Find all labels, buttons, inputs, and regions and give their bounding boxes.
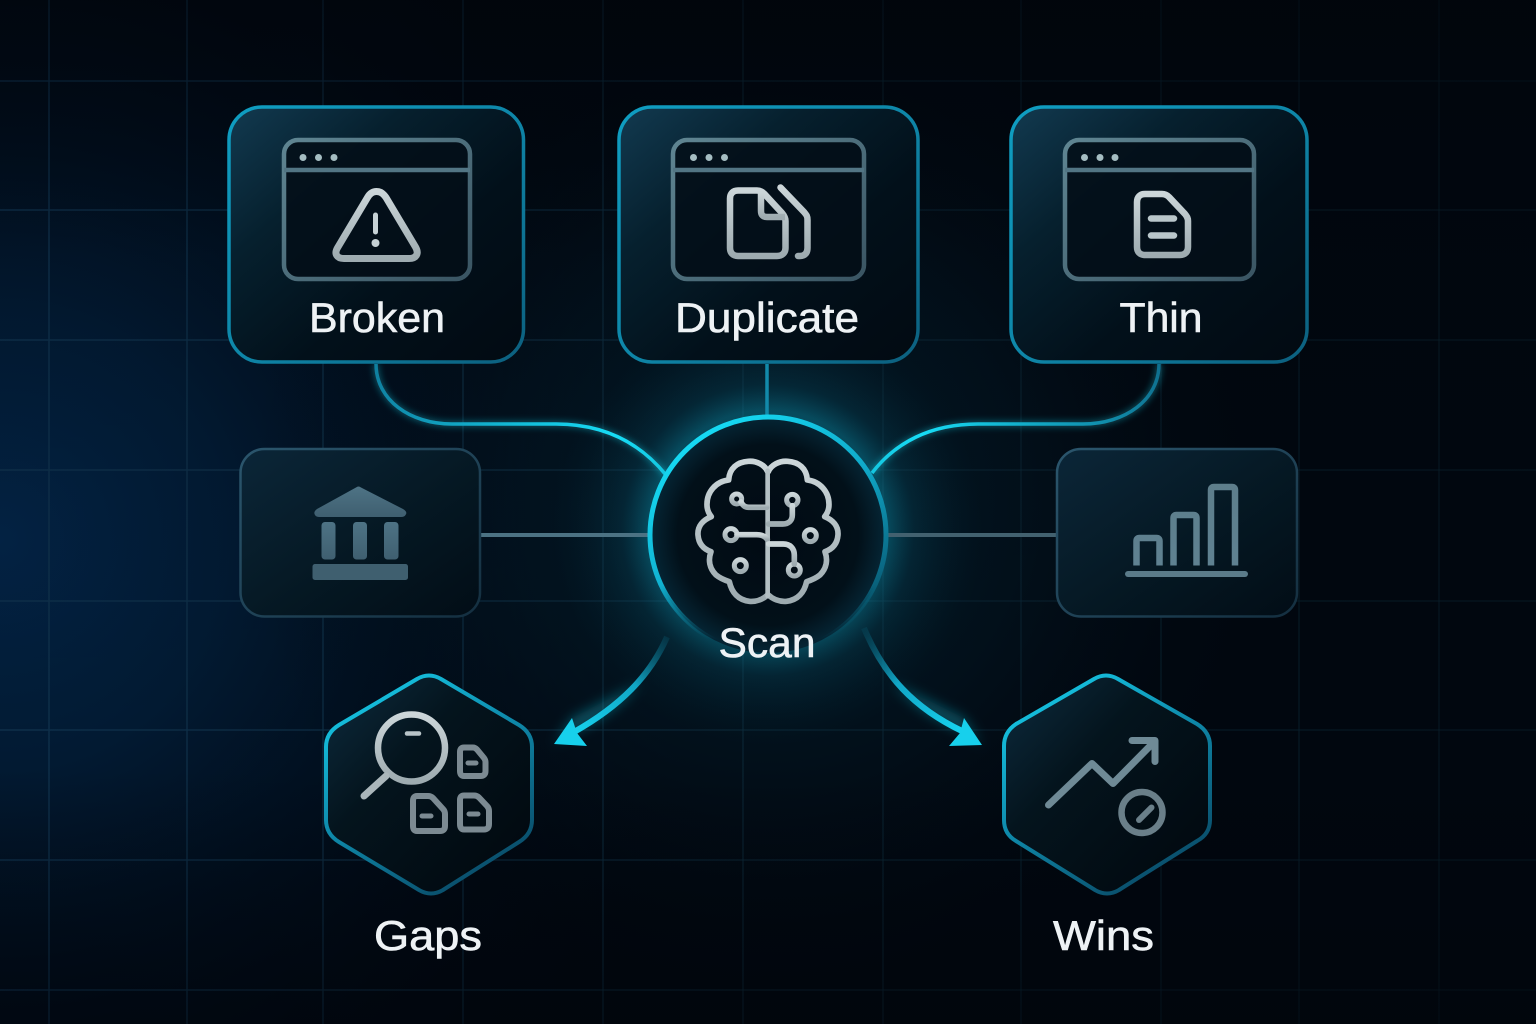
central Scan node: [650, 417, 886, 653]
icon: circular badge: [1122, 792, 1162, 833]
panel: Broken: [229, 107, 524, 362]
label: Wins: Wins: [1053, 912, 1154, 959]
panel: bank: [240, 449, 480, 616]
connector: chart panel to Scan: [888, 533, 1057, 537]
label: Broken: Broken: [309, 294, 445, 341]
icon: bar chart: [1128, 487, 1245, 574]
icon: document cluster: [413, 748, 489, 831]
icon: circuit brain: [698, 461, 838, 601]
panel: Thin: [1011, 107, 1307, 362]
label: Duplicate: Duplicate: [675, 294, 859, 341]
icon: rising trend arrow: [1048, 740, 1155, 805]
hexagon: Gaps: [326, 676, 532, 894]
panel: Duplicate: [619, 107, 918, 362]
arrow: Scan to Wins: [864, 628, 982, 746]
panel: bar chart: [1057, 449, 1297, 616]
panel: Wins: [1004, 676, 1210, 894]
arrow: Scan to Gaps: [554, 637, 667, 746]
icon: browser window with warning: [284, 140, 470, 279]
icon: browser window with duplicate documents: [673, 140, 864, 279]
connector: Broken to Scan: [376, 364, 666, 475]
label: Thin: Thin: [1120, 294, 1202, 341]
connector: Duplicate to Scan: [765, 364, 769, 420]
center halo glow: [553, 315, 983, 745]
connector: Thin to Scan: [872, 364, 1159, 473]
label: Gaps: Gaps: [374, 912, 482, 959]
panel: Gaps: [326, 676, 532, 894]
icon: browser window with thin document: [1065, 140, 1254, 279]
icon: magnifier: [364, 714, 445, 796]
label: Scan: Scan: [718, 619, 816, 666]
hexagon: Wins: [1004, 676, 1210, 894]
icon: bank building: [312, 486, 408, 580]
connector: bank panel to Scan: [480, 533, 650, 537]
